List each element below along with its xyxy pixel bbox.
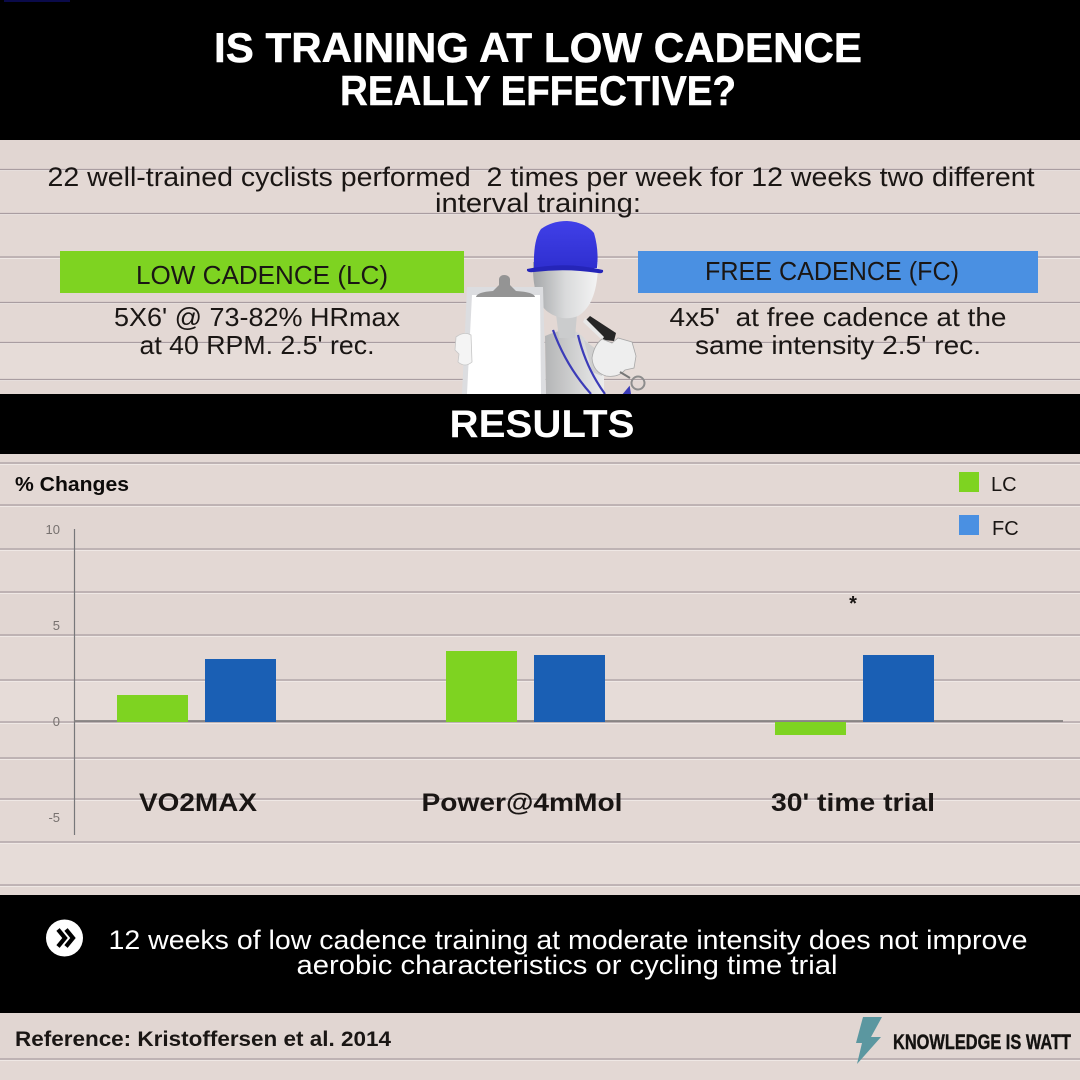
reference: Reference: Kristoffersen et al. 2014 [15, 1028, 391, 1051]
panel: low cadence: at 40 RPM. 2.5' rec. [140, 330, 374, 360]
logo: knowledge is watt [856, 1017, 1071, 1064]
bar chart: 0 [53, 714, 60, 729]
results banner: RESULTS [450, 403, 634, 446]
panel: free cadence: same intensity 2.5' rec. [695, 330, 981, 360]
bar chart: * [849, 593, 857, 615]
legend: FC [992, 518, 1019, 540]
conclusion banner: aerobic characteristics or cycling time trial [296, 950, 838, 980]
bar chart: Power@4mMol [422, 789, 622, 817]
panel: free cadence: 4x5' at free cadence at the [670, 302, 1006, 332]
title banner: IS TRAINING AT LOW CADENCE [214, 24, 862, 71]
study description [48, 162, 1035, 218]
bar chart: 30' time trial [771, 789, 935, 817]
conclusion banner [0, 895, 1080, 1013]
panel: low cadence [60, 251, 464, 360]
icon: coach figure with clipboard and whistle [455, 221, 644, 394]
icon: double chevron [46, 920, 83, 956]
bar chart: 5 [53, 618, 60, 633]
panel: low cadence: 5X6' @ 73-82% HRmax [114, 302, 400, 332]
legend [959, 472, 1019, 540]
panel: low cadence: LOW CADENCE (LC) [136, 260, 388, 290]
study description: interval training: [435, 188, 641, 218]
bar chart: 10 [46, 522, 60, 537]
legend: LC [991, 474, 1017, 496]
chart heading: % Changes [15, 474, 129, 496]
panel: free cadence: FREE CADENCE (FC) [705, 256, 959, 286]
title banner [0, 0, 1080, 140]
conclusion banner: 12 weeks of low cadence training at moderate intensity does not improve [108, 925, 1028, 955]
title banner: REALLY EFFECTIVE? [340, 67, 736, 114]
bar chart [46, 522, 1063, 835]
bar chart: VO2MAX [139, 789, 257, 817]
bar chart: -5 [48, 810, 60, 825]
study description: 22 well-trained cyclists performed 2 times per week for 12 weeks two different [48, 162, 1035, 192]
panel: free cadence [638, 251, 1038, 360]
results banner [0, 394, 1080, 454]
